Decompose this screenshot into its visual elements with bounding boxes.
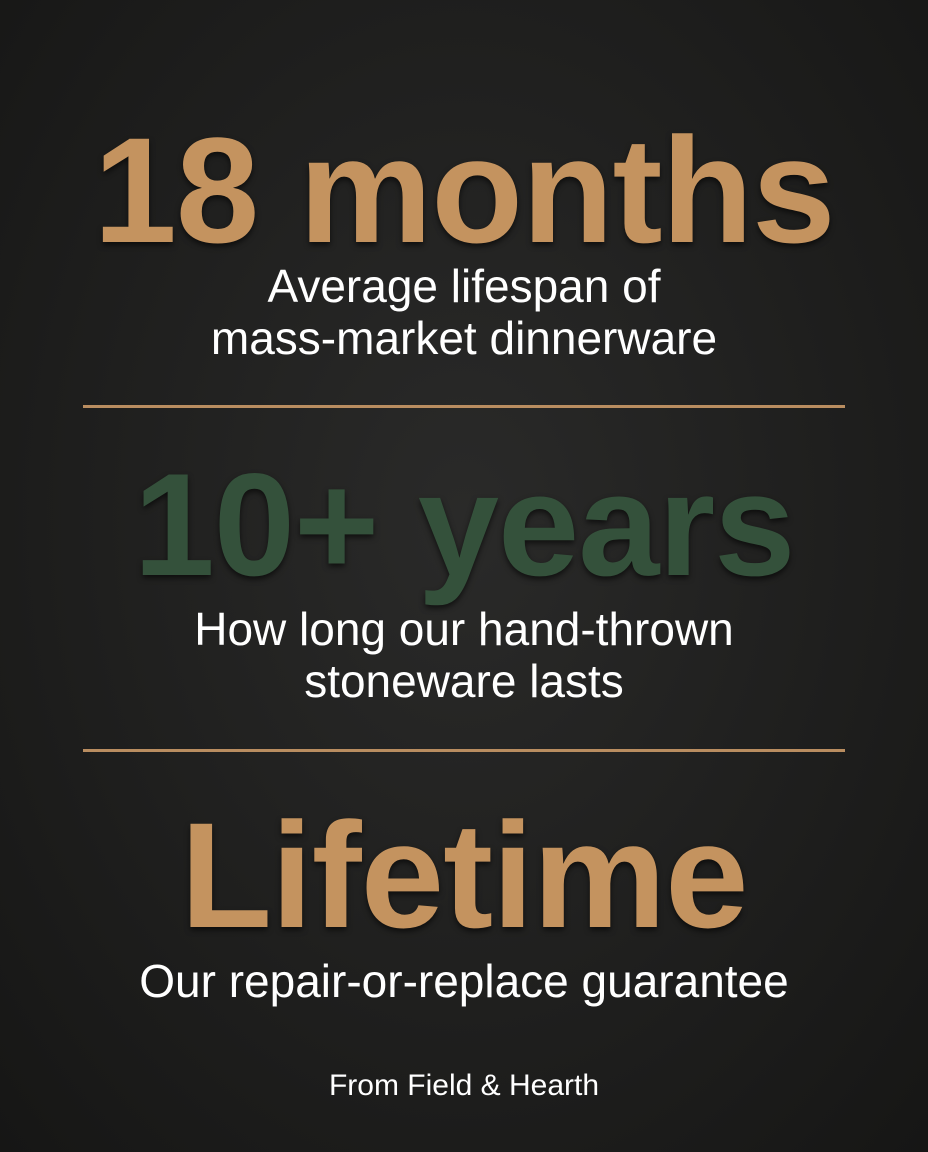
stat 1 caption: Average lifespan of xyxy=(268,260,660,312)
footer brand: From Field & Hearth xyxy=(329,1069,599,1102)
stat 2 number: 10+ years xyxy=(134,443,794,606)
stat 2 caption: How long our hand-thrown xyxy=(194,603,734,655)
stat 2 caption: stoneware lasts xyxy=(304,655,624,707)
stat 3 caption: Our repair-or-replace guarantee xyxy=(139,955,789,1007)
stat 1 number: 18 months xyxy=(93,106,835,274)
stat 1 caption: mass-market dinnerware xyxy=(211,312,717,364)
stat 3 number: Lifetime xyxy=(180,791,748,959)
stat 1 caption xyxy=(211,260,717,364)
stat 2 caption xyxy=(194,603,734,707)
